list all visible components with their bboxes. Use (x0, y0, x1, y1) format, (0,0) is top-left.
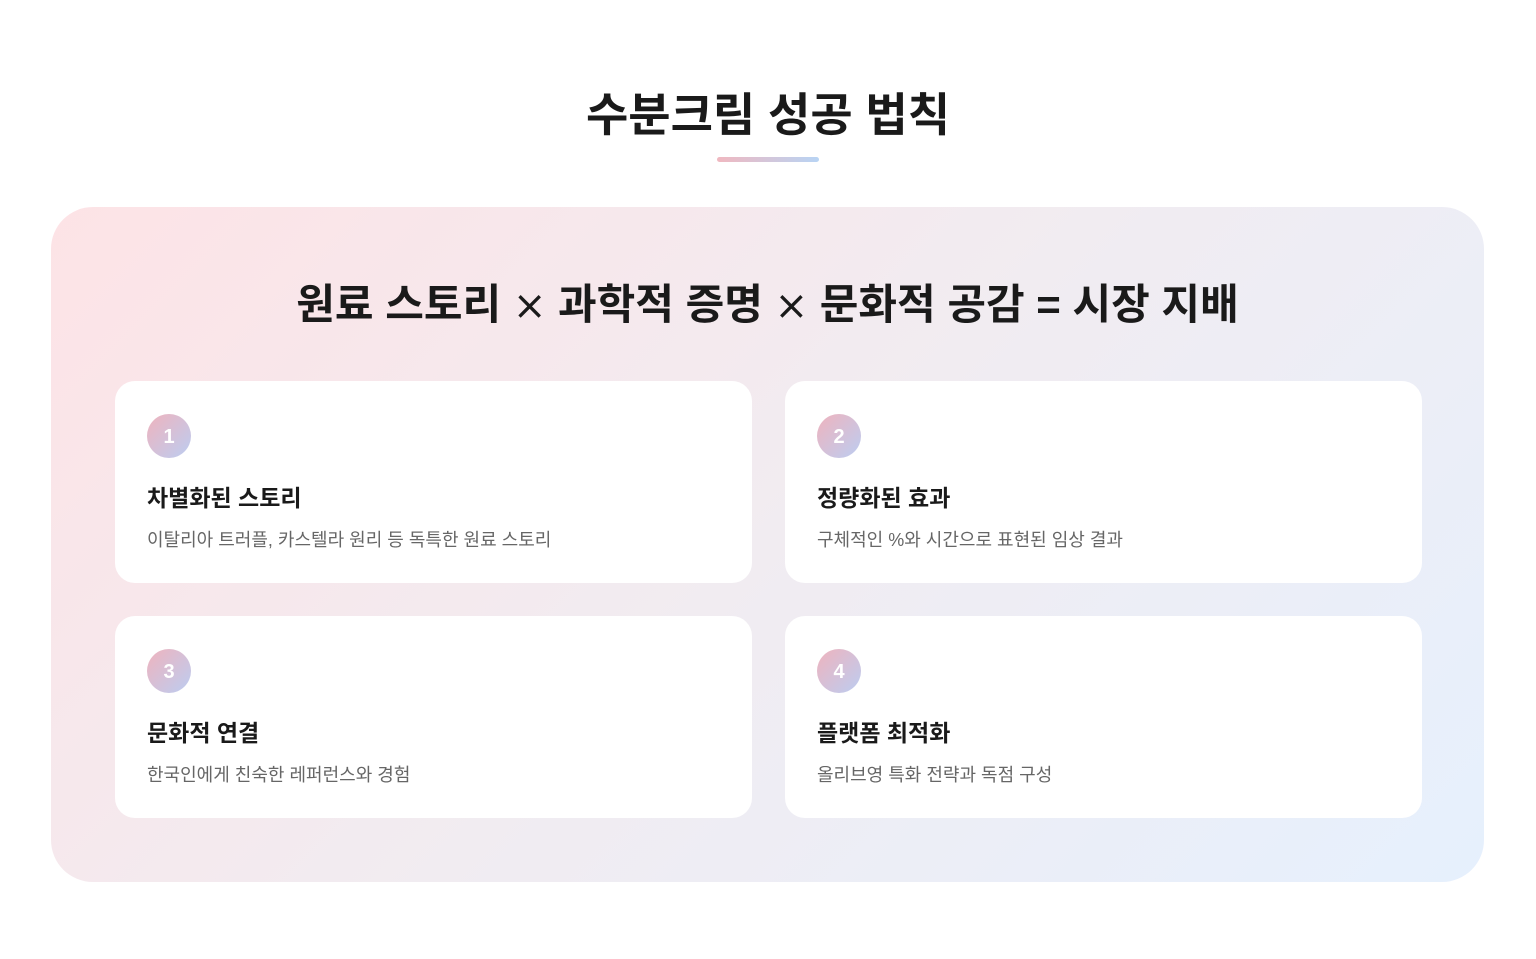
card 2 (785, 381, 1422, 583)
card 2 text: 구체적인 %와 시간으로 표현된 임상 결과 (817, 530, 1123, 550)
title: 수분크림 성공 법칙 (586, 89, 950, 141)
formula headline: 원료 스토리 × 과학적 증명 × 문화적 공감 = 시장 지배 (296, 281, 1239, 329)
card 1 text: 이탈리아 트러플, 카스텔라 원리 등 독특한 원료 스토리 (147, 530, 551, 550)
card 4 heading: 플랫폼 최적화 (817, 720, 950, 746)
card 1 (115, 381, 752, 583)
badge 3: 3 (163, 661, 175, 683)
badge 2: 2 (833, 426, 845, 448)
title underline (717, 157, 819, 162)
badge 1: 1 (163, 426, 175, 448)
card 2 heading: 정량화된 효과 (817, 485, 950, 511)
card 1 heading: 차별화된 스토리 (147, 485, 302, 511)
card 4 text: 올리브영 특화 전략과 독점 구성 (817, 765, 1052, 785)
card 3 (115, 616, 752, 818)
badge 4 (817, 649, 861, 693)
card 4 (785, 616, 1422, 818)
card 3 text: 한국인에게 친숙한 레퍼런스와 경험 (147, 765, 410, 785)
badge 1 (147, 414, 191, 458)
badge 2 (817, 414, 861, 458)
badge 4: 4 (833, 661, 845, 683)
badge 3 (147, 649, 191, 693)
card 3 heading: 문화적 연결 (147, 720, 259, 746)
panel: formula (51, 207, 1484, 882)
